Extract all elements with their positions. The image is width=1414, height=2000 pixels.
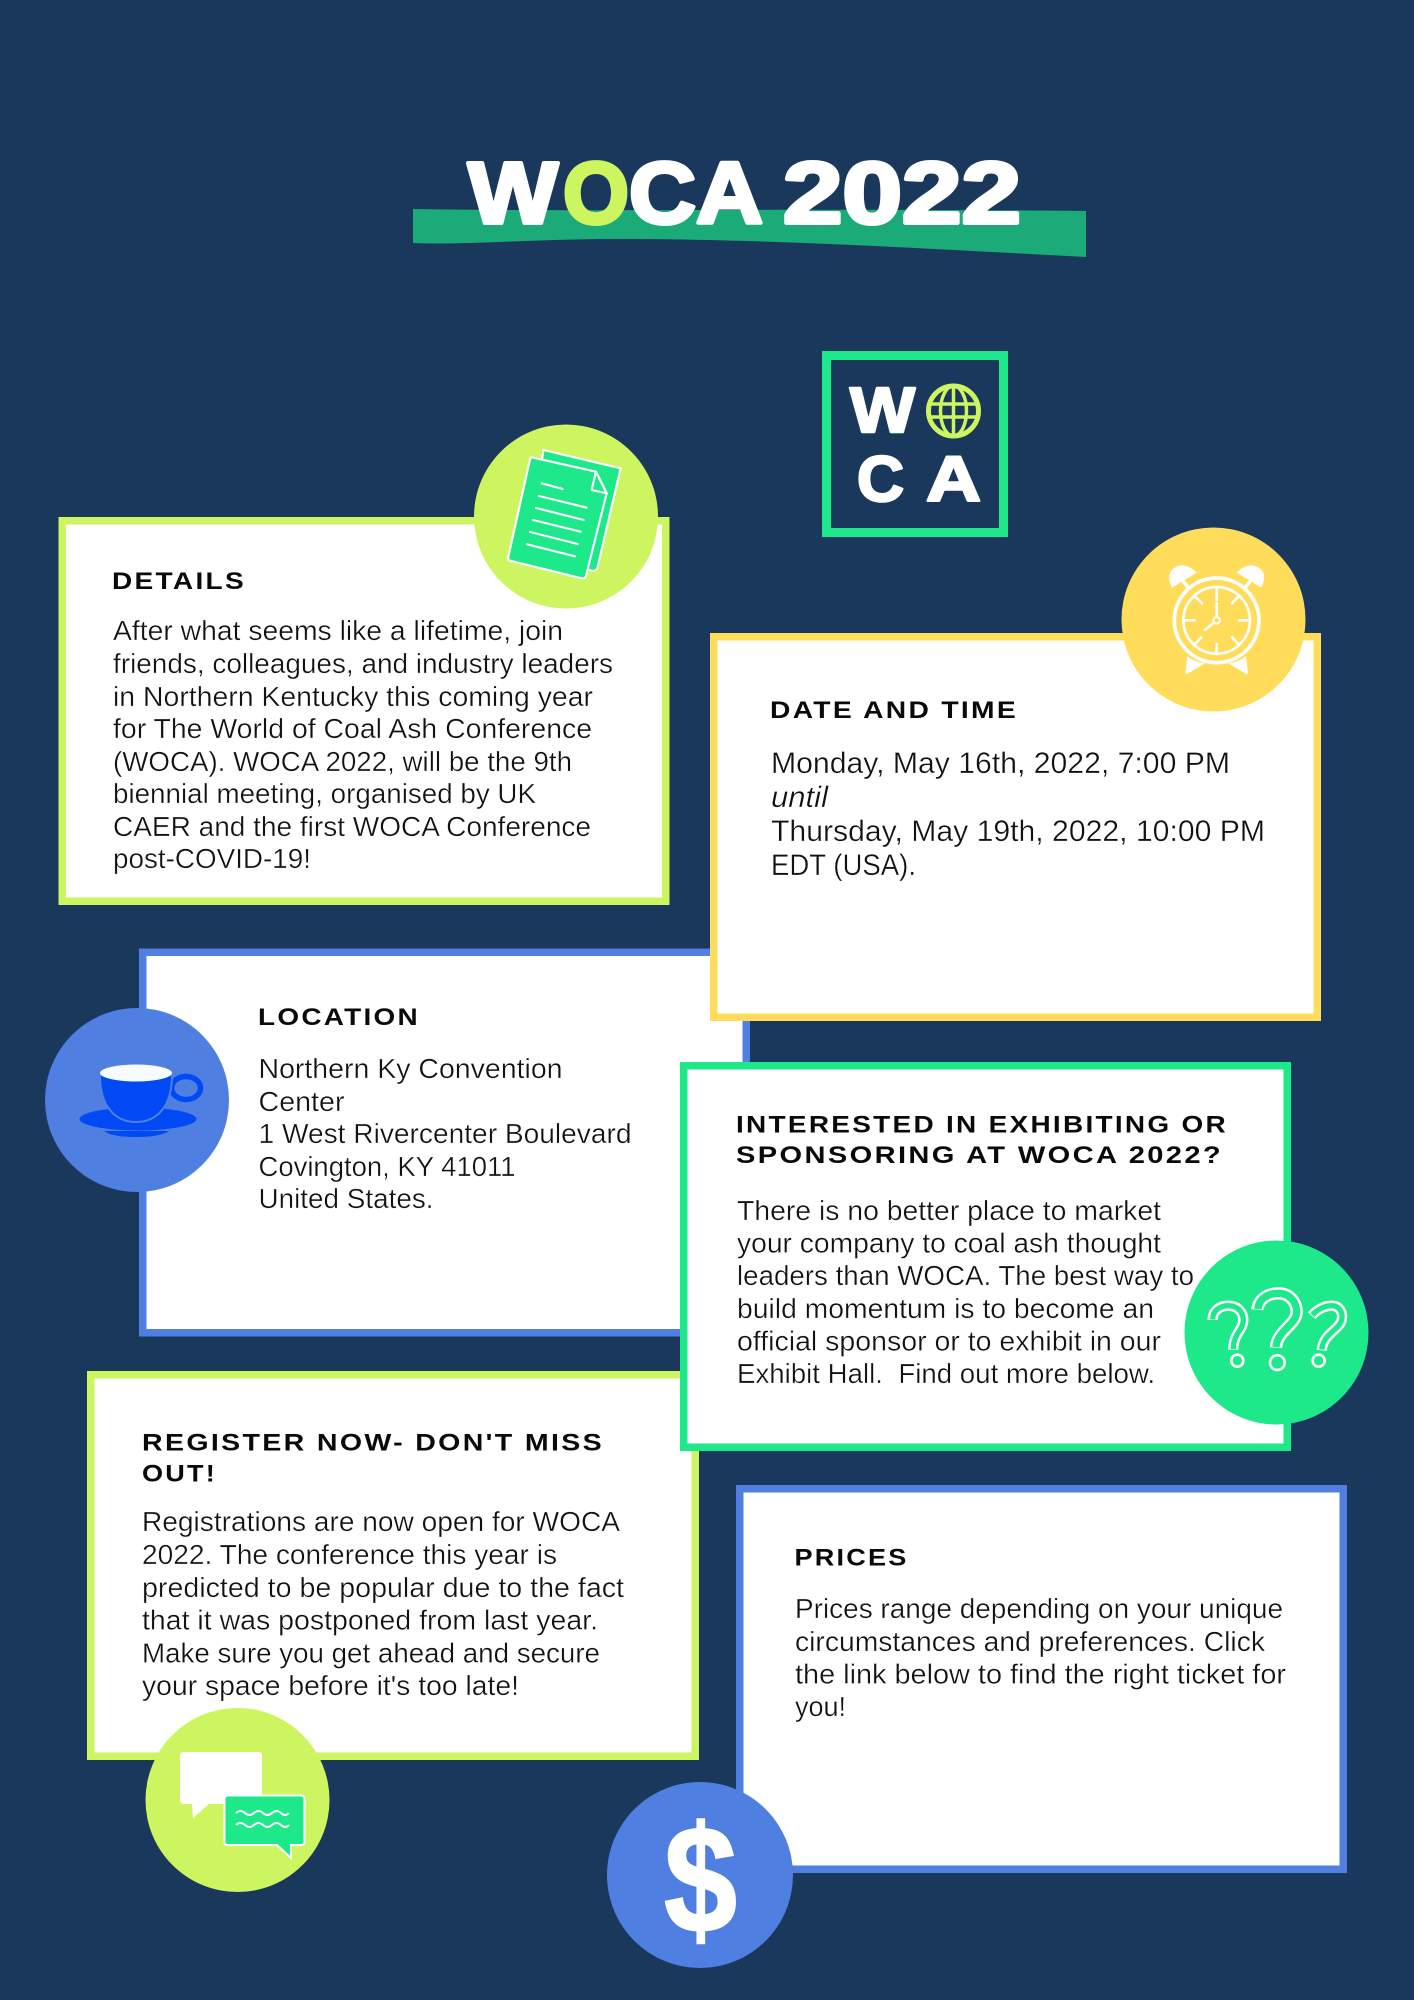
text block: register now xyxy=(142,1506,624,1701)
icon: alarm clock xyxy=(1122,528,1306,712)
text block: date and time xyxy=(771,747,1265,882)
logo: WOCA with globe: C xyxy=(857,443,904,515)
text block: prices: circumstances and preferences. Click xyxy=(795,1626,1266,1657)
icon: documents xyxy=(474,424,658,608)
text block: exhibiting or sponsoring: leaders than WOCA. The best way to xyxy=(737,1260,1194,1291)
text block: location: Center xyxy=(258,1086,344,1117)
title: CA xyxy=(629,145,763,242)
text block: details: for The World of Coal Ash Conference xyxy=(113,713,592,744)
text block: prices: the link below to find the right ticket for xyxy=(795,1658,1286,1690)
text block: register now: Make sure you get ahead and secure xyxy=(142,1638,600,1668)
heading: register now xyxy=(142,1430,604,1488)
logo: WOCA with globe: W xyxy=(850,374,916,446)
heading: exhibiting or sponsoring xyxy=(736,1112,1228,1169)
title with brush stroke xyxy=(413,145,1086,257)
icon: coffee cup xyxy=(45,1008,229,1192)
text block: exhibiting or sponsoring: your company to coal ash thought xyxy=(737,1228,1161,1258)
panel: register now xyxy=(91,1375,695,1756)
text block: exhibiting or sponsoring xyxy=(737,1195,1194,1389)
text block: date and time: Thursday, May 19th, 2022, 10:00 PM xyxy=(771,815,1265,848)
heading: register now: REGISTER NOW- DON'T MISS xyxy=(142,1430,604,1456)
icon: dollar sign: $ xyxy=(664,1795,737,1965)
panel: details xyxy=(62,521,666,901)
green brush stroke xyxy=(413,209,1086,257)
text block: details: post-COVID-19! xyxy=(113,843,311,874)
icon: chat bubbles xyxy=(146,1708,330,1892)
title: 2022 xyxy=(783,145,1021,242)
text block: register now: 2022. The conference this year is xyxy=(142,1539,557,1570)
heading: details: DETAILS xyxy=(112,568,246,595)
heading: prices: PRICES xyxy=(794,1544,908,1572)
text block: location: 1 West Rivercenter Boulevard xyxy=(258,1118,632,1149)
text block: date and time: Monday, May 16th, 2022, 7:00 PM xyxy=(771,747,1230,780)
logo: WOCA with globe: A xyxy=(926,443,981,515)
heading: exhibiting or sponsoring: INTERESTED IN EXHIBITING OR xyxy=(736,1112,1228,1138)
title xyxy=(468,145,1021,242)
text block: exhibiting or sponsoring: official sponsor or to exhibit in our xyxy=(737,1326,1161,1356)
panel: exhibiting or sponsoring xyxy=(684,1066,1287,1447)
heading: exhibiting or sponsoring: SPONSORING AT WOCA 2022? xyxy=(736,1142,1223,1169)
logo: WOCA with globe xyxy=(826,356,1004,532)
text block: location: United States. xyxy=(258,1183,434,1214)
text block: date and time: until xyxy=(771,781,829,814)
text block: location: Covington, KY 41011 xyxy=(258,1151,516,1182)
text block: exhibiting or sponsoring: Exhibit Hall. Find out more below. xyxy=(737,1358,1155,1389)
text block: register now: your space before it's too late! xyxy=(142,1670,519,1701)
text block: location xyxy=(258,1053,632,1214)
icon: dollar sign xyxy=(607,1782,793,1968)
text block: date and time: EDT (USA). xyxy=(771,849,916,882)
text block: prices: Prices range depending on your unique xyxy=(795,1593,1283,1624)
title: W xyxy=(468,145,559,242)
text block: details: After what seems like a lifetime, join xyxy=(113,615,563,646)
panel: location xyxy=(143,952,746,1333)
text block: details: CAER and the first WOCA Conference xyxy=(113,811,591,842)
text block: register now: that it was postponed from last year. xyxy=(142,1604,598,1636)
heading: register now: OUT! xyxy=(142,1460,217,1488)
text block: prices xyxy=(795,1593,1286,1722)
title: O xyxy=(563,145,629,242)
text block: exhibiting or sponsoring: build momentum is to become an xyxy=(737,1293,1154,1324)
text block: exhibiting or sponsoring: There is no better place to market xyxy=(737,1195,1161,1226)
text block: details: (WOCA). WOCA 2022, will be the 9th xyxy=(113,746,572,777)
panel: date and time xyxy=(714,637,1317,1017)
icon: globe xyxy=(928,386,978,436)
text block: register now: predicted to be popular due to the fact xyxy=(142,1572,624,1603)
panel: prices xyxy=(740,1489,1343,1869)
text block: register now: Registrations are now open for WOCA xyxy=(142,1506,620,1537)
heading: date and time: DATE AND TIME xyxy=(770,697,1018,724)
text block: details xyxy=(113,615,613,874)
text block: details: in Northern Kentucky this coming year xyxy=(113,681,593,712)
text block: details: biennial meeting, organised by UK xyxy=(113,778,536,809)
text block: prices: you! xyxy=(795,1691,846,1722)
heading: location: LOCATION xyxy=(258,1004,420,1031)
text block: details: friends, colleagues, and industry leaders xyxy=(113,648,613,679)
icon: question marks xyxy=(1184,1240,1368,1424)
text block: location: Northern Ky Convention xyxy=(258,1053,562,1084)
